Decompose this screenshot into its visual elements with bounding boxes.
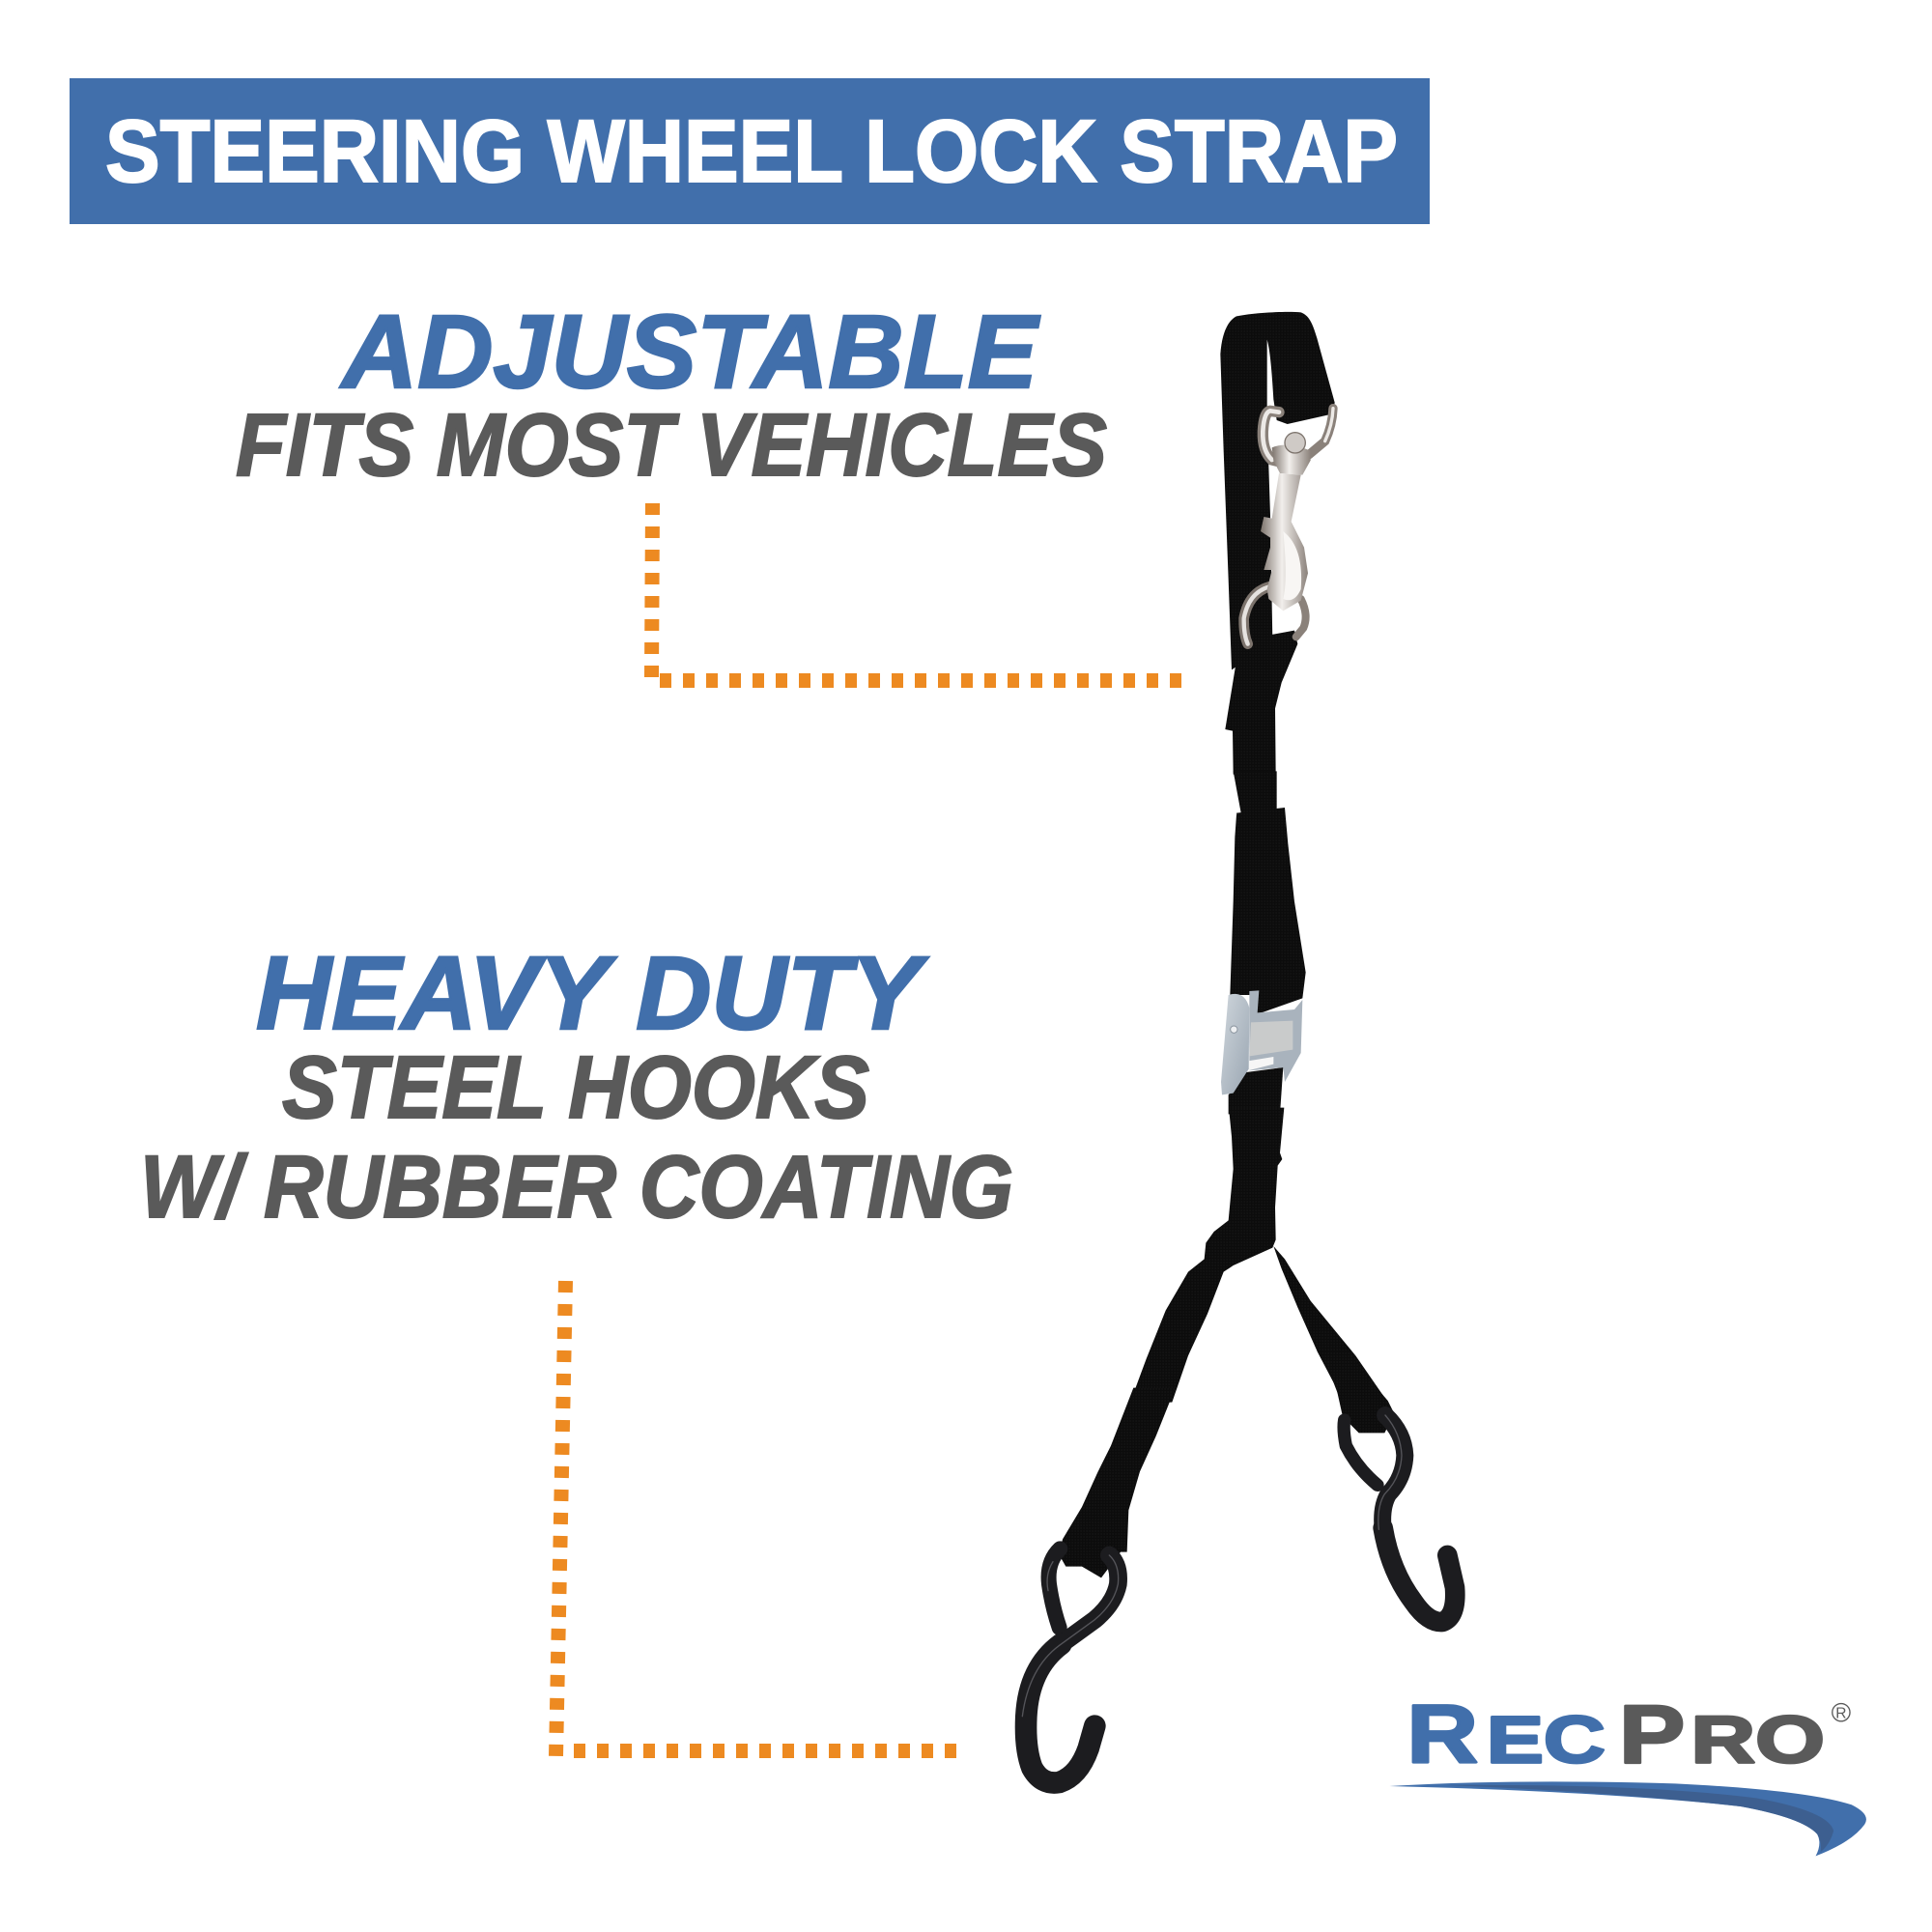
- logo wordmark: [1406, 1690, 1825, 1781]
- strap junction and upper branches: [1130, 1108, 1388, 1403]
- product: steering wheel lock strap: [1022, 312, 1455, 1783]
- logo wordmark: RO: [1690, 1703, 1825, 1777]
- heading: heavy duty: [140, 934, 1013, 1236]
- heading: adjustable: FITS MOST VEHICLES: [236, 396, 1107, 495]
- callout line: adjustable: [651, 503, 1181, 680]
- logo: RecPro: [1389, 1690, 1866, 1856]
- title banner: [70, 78, 1430, 224]
- cam buckle and adjuster strap: [1221, 771, 1306, 1114]
- heading: heavy duty: W/ RUBBER COATING: [140, 1138, 1013, 1236]
- heading: heavy duty: HEAVY DUTY: [256, 934, 929, 1051]
- heading: adjustable: [236, 293, 1107, 495]
- logo wordmark: R: [1406, 1690, 1478, 1781]
- logo swoosh: [1389, 1781, 1866, 1856]
- logo wordmark: P: [1619, 1690, 1685, 1781]
- registered mark: R: [1835, 1705, 1847, 1721]
- right lower strap and S-hook: [1317, 1350, 1455, 1622]
- heading: adjustable: ADJUSTABLE: [339, 293, 1040, 410]
- heading: heavy duty: STEEL HOOKS: [282, 1038, 869, 1137]
- logo wordmark: EC: [1487, 1703, 1605, 1777]
- left lower strap and S-hook: [1022, 1388, 1176, 1783]
- upper strap with snap hook: [1220, 312, 1335, 775]
- title banner: STEERING WHEEL LOCK STRAP: [105, 102, 1398, 201]
- registered mark: [1833, 1704, 1850, 1721]
- callout line: heavy duty: [556, 1281, 956, 1756]
